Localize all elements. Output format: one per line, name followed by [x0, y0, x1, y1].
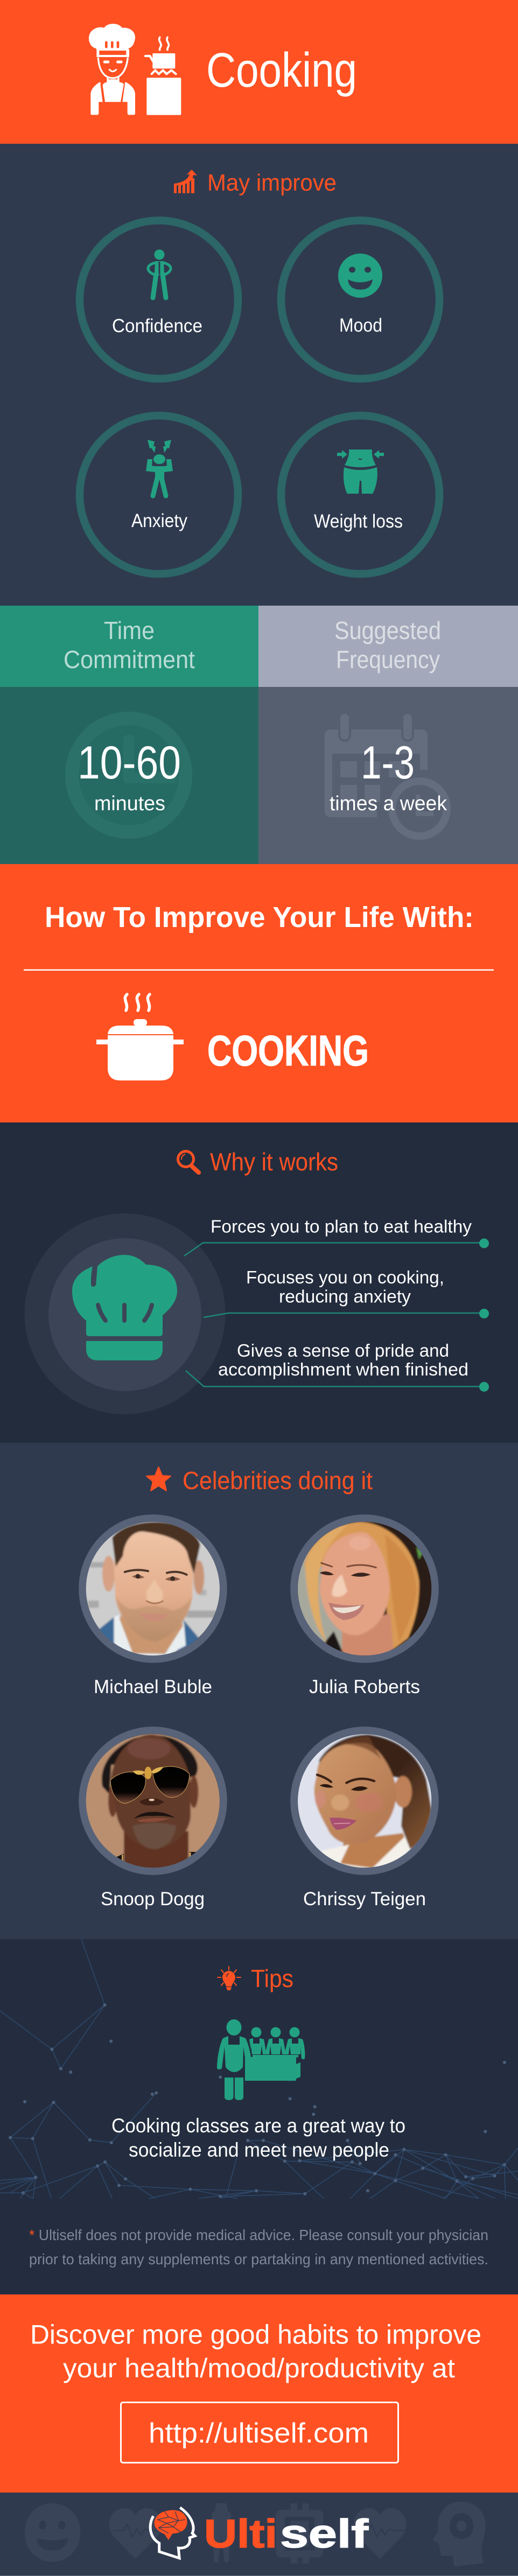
panel: celebrities: [79, 1466, 439, 1909]
name: Michael Buble: Michael Buble: [94, 1676, 212, 1697]
panel: why it works: [0, 1122, 518, 1443]
icon: calendar: [325, 712, 451, 840]
button: url: [121, 2402, 398, 2462]
heading: time commitment: [64, 616, 195, 673]
item: confidence: Confidence: [112, 315, 202, 336]
icon: cooking class: [217, 2019, 305, 2100]
background icons: [25, 2502, 486, 2567]
item: confidence: [80, 221, 238, 379]
icon: clock: [72, 718, 185, 832]
logo: [150, 2508, 368, 2558]
button: url: http://ultiself.com: [149, 2418, 369, 2449]
text: tip: socialize and meet new people: [129, 2139, 389, 2161]
icon: pot: [96, 994, 184, 1080]
reason 1: Forces you to plan to eat healthy: [211, 1217, 472, 1236]
text: discover more: [30, 2319, 481, 2383]
reason 3: accomplishment when finished: [218, 1359, 468, 1379]
panel: how to improve: [0, 864, 518, 1122]
icon: chef and stove: [89, 24, 181, 115]
item: anxiety: Anxiety: [131, 510, 187, 531]
item: mood: Mood: [339, 315, 382, 336]
label: cooking: COOKING: [207, 1027, 369, 1075]
panel: suggested frequency: [258, 606, 518, 864]
icon: magnifier: [178, 1151, 199, 1173]
stat: 10-60 minutes: minutes: [94, 792, 165, 815]
heading: may improve: May improve: [207, 170, 337, 196]
item: weight loss: [281, 416, 439, 574]
portrait: Michael Buble: [75, 1513, 232, 1669]
reason 3: Gives a sense of pride and: [237, 1340, 449, 1360]
logo: self: [280, 2511, 368, 2556]
panel: may improve: [0, 144, 518, 606]
text: discover more: your health/mood/productivity at: [63, 2353, 455, 2383]
heading: suggested frequency: [334, 616, 441, 673]
heading: suggested frequency: Frequency: [336, 645, 440, 673]
reason 3: [186, 1340, 489, 1392]
panel: time commitment: [0, 606, 258, 864]
panel: disclaimer: * Ultiself does not provide medical advice. Please consult your physician: [29, 2227, 488, 2243]
heading: how to improve: How To Improve Your Life With:: [45, 901, 474, 933]
network background: [0, 1938, 518, 2199]
logo icon: brain and head: [150, 2508, 195, 2558]
name: Chrissy Teigen: Chrissy Teigen: [303, 1889, 426, 1910]
panel: footer: [0, 2493, 518, 2576]
reason 1: [184, 1217, 489, 1256]
panel: disclaimer: [0, 2199, 518, 2294]
heading: time commitment: Time: [104, 616, 155, 644]
panel: disclaimer: prior to taking any supplements or partaking in any mentioned activities.: [29, 2251, 488, 2268]
portrait: Chrissy Teigen: [288, 1725, 444, 1882]
item: weight loss: Weight loss: [314, 511, 403, 532]
reason 2: [204, 1267, 489, 1318]
panel: header: [0, 0, 518, 144]
panel: call to action: [0, 2294, 518, 2493]
title: Cooking: [206, 44, 357, 97]
stat: 1-3 times a week: [330, 737, 447, 815]
reason 2: Focuses you on cooking,: [246, 1267, 444, 1287]
heading: why it works: Why it works: [210, 1148, 338, 1176]
icon: star: [146, 1467, 171, 1491]
icon: rising chart: [174, 170, 197, 193]
icon: light bulb: [218, 1967, 241, 1990]
heading: celebrities: Celebrities doing it: [183, 1466, 373, 1494]
stat: 10-60 minutes: 10-60: [78, 737, 181, 789]
text: tip: [111, 2115, 405, 2161]
item: anxiety: [80, 416, 238, 574]
name: Julia Roberts: Julia Roberts: [309, 1676, 420, 1697]
panel: tips: [0, 1938, 518, 2199]
stat: 10-60 minutes: [78, 737, 181, 815]
text: tip: Cooking classes are a great way to: [111, 2115, 405, 2137]
name: Snoop Dogg: Snoop Dogg: [101, 1889, 205, 1910]
heading: tips: Tips: [251, 1964, 293, 1992]
text: discover more: Discover more good habits to improve: [30, 2319, 481, 2349]
portrait: Snoop Dogg: [75, 1725, 232, 1882]
icon: chef hat in circles: [25, 1213, 225, 1414]
heading: time commitment: Commitment: [64, 645, 195, 673]
stat: 1-3 times a week: 1-3: [361, 737, 415, 789]
wordmark: Ulti: [204, 2511, 277, 2556]
reason 2: reducing anxiety: [279, 1287, 411, 1306]
heading: suggested frequency: Suggested: [334, 616, 441, 644]
portrait: Julia Roberts: [288, 1513, 444, 1669]
stat: 1-3 times a week: times a week: [330, 792, 447, 815]
item: mood: [281, 221, 439, 379]
